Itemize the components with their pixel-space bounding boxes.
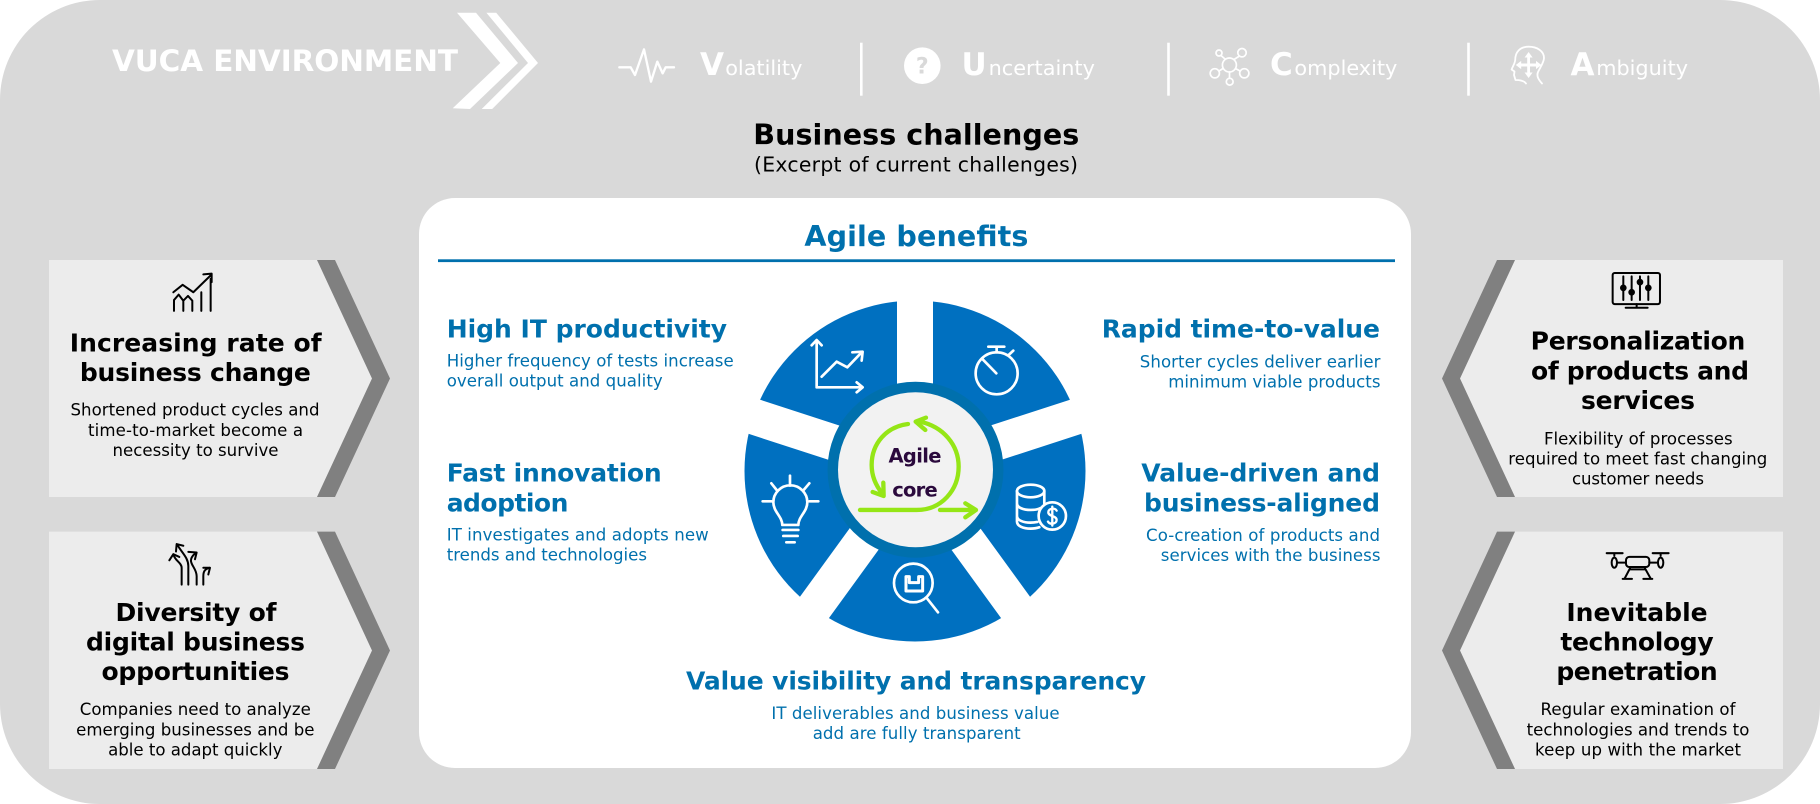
- label: Agile core: [888, 444, 942, 502]
- icon: stopwatch: [976, 347, 1018, 394]
- description: [1527, 700, 1749, 759]
- benefit: fast innovation adoption: Fast innovation: [447, 459, 662, 488]
- benefit: high IT productivity: [447, 315, 734, 391]
- icon: uncertainty question mark: ?: [916, 54, 929, 80]
- icon: green cycle arrows: [860, 418, 976, 517]
- heading: VUCA environment: VUCA ENVIRONMENT: [112, 44, 458, 78]
- icon: coins database: [1017, 485, 1066, 530]
- separator: [1167, 43, 1170, 96]
- description: [70, 401, 320, 460]
- description: keep up with the market: [1535, 740, 1741, 759]
- heading: Business challenges: Business challenges: [753, 117, 1079, 151]
- icon: complexity network: [1210, 48, 1249, 85]
- description: Regular examination of: [1540, 700, 1737, 719]
- description: time-to-market become a: [88, 421, 303, 440]
- benefit: high IT productivity: High IT productivity: [447, 315, 727, 344]
- panel: challenge personalization of products and services: of products and: [1531, 356, 1749, 386]
- benefit: value-driven and business-aligned: [1141, 459, 1380, 565]
- icon: ambiguity head with arrows: [1512, 47, 1544, 84]
- icon: volatility pulse: [619, 49, 674, 82]
- separator: [1467, 43, 1470, 96]
- separator: [860, 43, 863, 96]
- benefit: value-driven and business-aligned: business-aligned: [1144, 489, 1380, 518]
- icon: monitor with sliders: [1613, 273, 1660, 308]
- description: Shortened product cycles and: [70, 401, 320, 420]
- label: Complexity: C: [1270, 47, 1293, 83]
- icon: diverging arrows: [169, 544, 210, 585]
- label: Agile core: core: [892, 478, 938, 502]
- panel: challenge inevitable technology penetration: technology: [1560, 628, 1714, 657]
- icon: uncertainty question mark: [904, 47, 941, 84]
- heading: Agile benefits: Agile benefits: [804, 219, 1028, 253]
- label: Uncertainty: ncertainty: [989, 56, 1095, 80]
- benefit: value visibility and transparency: Value visibility and transparency: [686, 666, 1146, 695]
- label: Uncertainty: U: [962, 47, 987, 83]
- icon: light bulb: [763, 476, 818, 542]
- icon: magnifier with box: [894, 564, 938, 612]
- description: emerging businesses and be: [76, 720, 314, 740]
- panel: challenge diversity of digital business opportunities: digital business: [86, 628, 305, 657]
- icon: drone: [1607, 553, 1669, 579]
- benefit: fast innovation adoption: trends and technologies: [447, 546, 647, 565]
- benefit: value-driven and business-aligned: services with the business: [1161, 546, 1380, 565]
- benefit: high IT productivity: Higher frequency of tests increase: [447, 352, 734, 371]
- benefit: fast innovation adoption: [447, 459, 709, 565]
- label: Ambiguity: mbiguity: [1596, 56, 1688, 80]
- panel: Agile benefits: [419, 198, 1411, 768]
- description: necessity to survive: [112, 441, 278, 460]
- benefit: rapid time-to-value: Rapid time-to-value: [1102, 315, 1380, 344]
- benefit: rapid time-to-value: [1102, 315, 1381, 391]
- panel: challenge diversity of digital business opportunities: [49, 532, 390, 769]
- icon: double chevron arrow: [453, 13, 538, 109]
- icon: growth chart: [812, 340, 863, 392]
- label: Volatility: V: [700, 47, 724, 83]
- label: Ambiguity: A: [1570, 47, 1594, 83]
- description: [1508, 429, 1767, 488]
- panel: challenge personalization of products and services: services: [1581, 386, 1695, 415]
- label: Complexity: omplexity: [1294, 56, 1397, 80]
- heading: Business challenges: [753, 117, 1079, 177]
- heading: Personalization: [1531, 327, 1745, 356]
- icon: rising bar chart: [173, 274, 212, 311]
- benefit: high IT productivity: overall output and quality: [447, 372, 663, 391]
- heading: Increasing rate of: [70, 328, 323, 357]
- label: Volatility: olatility: [725, 56, 802, 80]
- description: customer needs: [1572, 469, 1704, 488]
- benefit: fast innovation adoption: IT investigates and adopts new: [447, 526, 709, 545]
- VUCA header band: [112, 13, 1688, 109]
- panel: challenge personalization of products and services: [1442, 260, 1783, 497]
- benefit: value-driven and business-aligned: Co-creation of products and: [1146, 526, 1380, 545]
- description: [76, 700, 314, 759]
- description: Companies need to analyze: [80, 700, 311, 719]
- benefit: rapid time-to-value: Shorter cycles deliver earlier: [1140, 352, 1381, 371]
- benefit: fast innovation adoption: adoption: [447, 488, 568, 517]
- description: able to adapt quickly: [108, 740, 283, 759]
- description: required to meet fast changing: [1508, 450, 1767, 469]
- panel: challenge increasing rate of business change: business change: [80, 358, 311, 387]
- benefit: value visibility and transparency: [686, 666, 1146, 743]
- chart: Agile wheel: [737, 288, 1093, 642]
- benefit: value-driven and business-aligned: Value-driven and: [1141, 459, 1380, 488]
- description: technologies and trends to: [1527, 720, 1749, 740]
- panel: challenge diversity of digital business opportunities: opportunities: [102, 657, 290, 686]
- heading: Business challenges: (Excerpt of current challenges): [754, 153, 1078, 177]
- benefit: value visibility and transparency: add are fully transparent: [813, 724, 1021, 743]
- label: Agile core: Agile: [888, 444, 942, 468]
- heading: Diversity of: [116, 598, 278, 627]
- panel: challenge inevitable technology penetration: [1442, 532, 1783, 769]
- panel: challenge increasing rate of business change: [49, 260, 390, 497]
- benefit: rapid time-to-value: minimum viable products: [1168, 372, 1380, 391]
- benefit: value visibility and transparency: IT deliverables and business value: [771, 704, 1060, 723]
- panel: challenge inevitable technology penetration: penetration: [1556, 657, 1718, 686]
- heading: Inevitable: [1566, 598, 1708, 627]
- description: Flexibility of processes: [1544, 429, 1733, 448]
